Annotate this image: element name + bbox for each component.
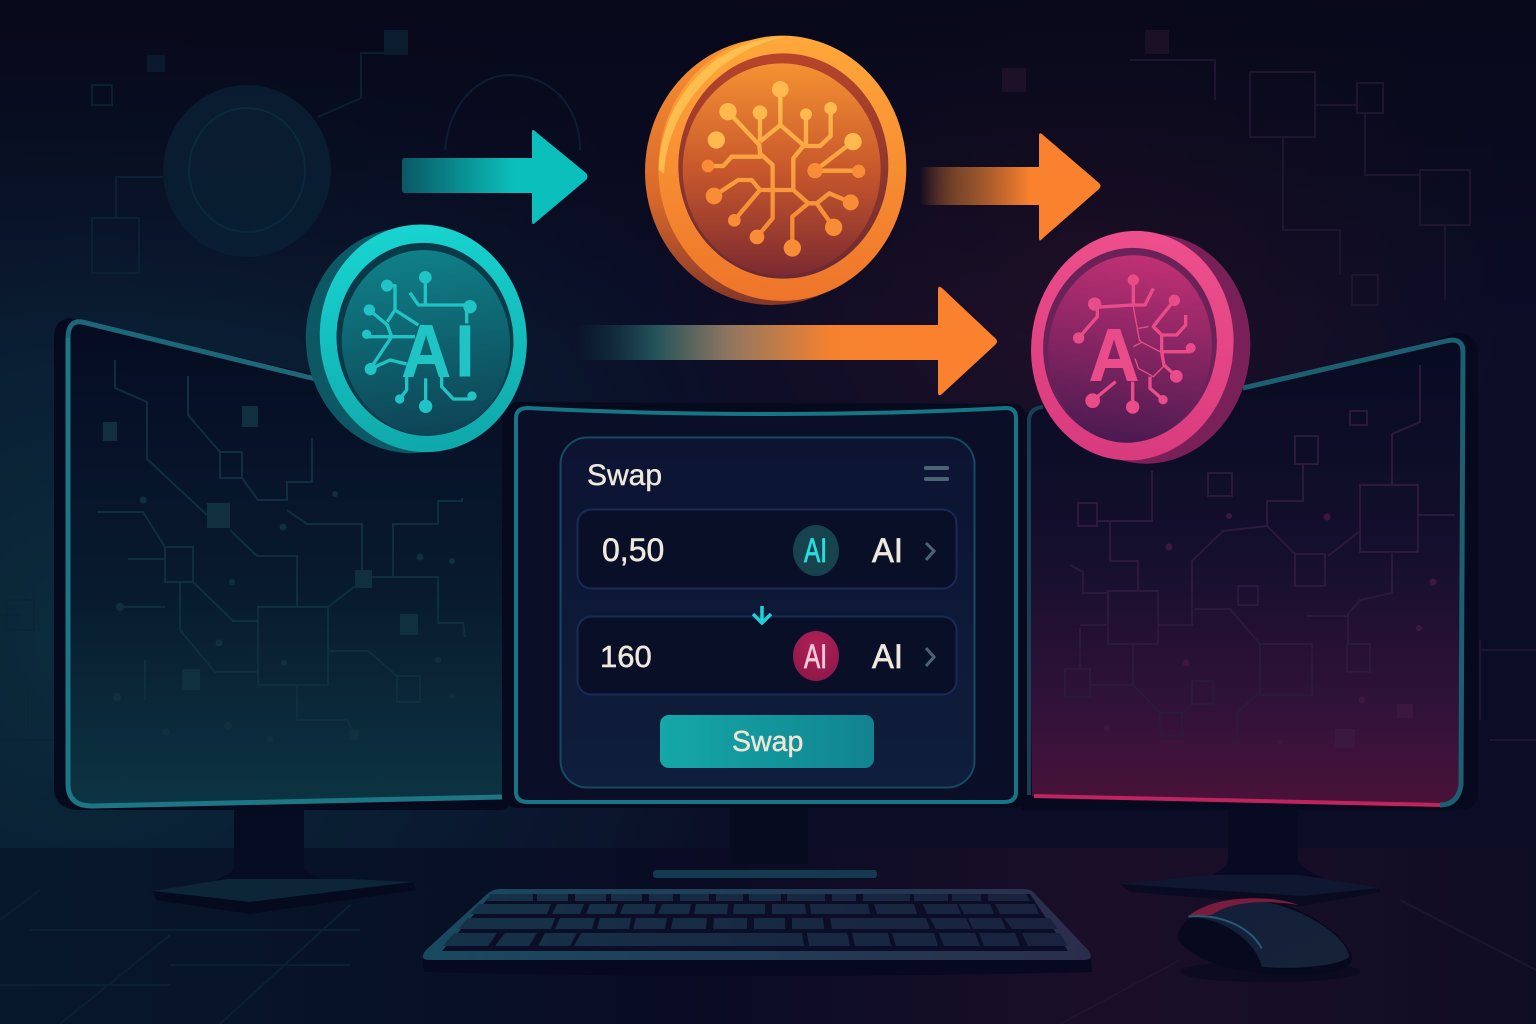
arrow: long direct route teal to pink <box>575 287 997 395</box>
keys <box>443 894 1068 946</box>
coin: teal AI: A <box>402 310 451 393</box>
mouse shell <box>1188 901 1349 968</box>
swap button: Swap <box>732 726 803 758</box>
coin: teal AI <box>291 211 542 466</box>
monitor: right <box>1018 332 1478 906</box>
keyboard <box>423 889 1092 976</box>
right screen circuit decoration <box>1065 365 1455 743</box>
swap direction arrow <box>753 606 771 623</box>
crack lines <box>1133 307 1163 377</box>
token badge: pink: AI <box>804 638 827 676</box>
arrow: teal to orange coin <box>402 130 588 224</box>
input row: pay: 0,50 <box>602 532 664 568</box>
coin: orange circuit <box>645 36 906 305</box>
token badge: teal <box>793 525 839 576</box>
swap button <box>660 715 874 768</box>
mouse teal edge <box>1188 916 1262 948</box>
chevron <box>926 543 934 560</box>
input row: receive: 160 <box>600 639 652 674</box>
coin: pink cracked: A <box>1089 314 1139 397</box>
input row: receive <box>578 616 956 694</box>
token badge: pink <box>793 631 839 681</box>
circuit emblem <box>1079 280 1191 407</box>
mouse <box>1178 898 1360 982</box>
left screen circuit decoration <box>97 360 465 736</box>
circuit emblem <box>367 277 472 406</box>
input row: receive: AI <box>872 638 903 676</box>
circuit emblem <box>708 89 859 248</box>
coin: teal AI: I <box>455 310 475 393</box>
monitor: centre with swap interface <box>508 402 1024 878</box>
menu icon <box>924 466 949 481</box>
input row: pay: AI <box>872 532 903 570</box>
left monitor stand <box>153 806 416 914</box>
swap panel <box>560 438 974 788</box>
mouse red highlight <box>1188 898 1298 916</box>
arrow: orange coin to pink coin <box>920 133 1100 240</box>
coin: pink cracked <box>1016 218 1265 477</box>
panel heading: Swap <box>587 459 662 492</box>
input row: pay <box>578 510 956 588</box>
chevron <box>926 648 934 666</box>
monitor: left <box>54 318 510 914</box>
token badge: teal: AI <box>804 532 827 570</box>
centre monitor stand <box>653 806 877 878</box>
right monitor stand <box>1120 806 1380 906</box>
